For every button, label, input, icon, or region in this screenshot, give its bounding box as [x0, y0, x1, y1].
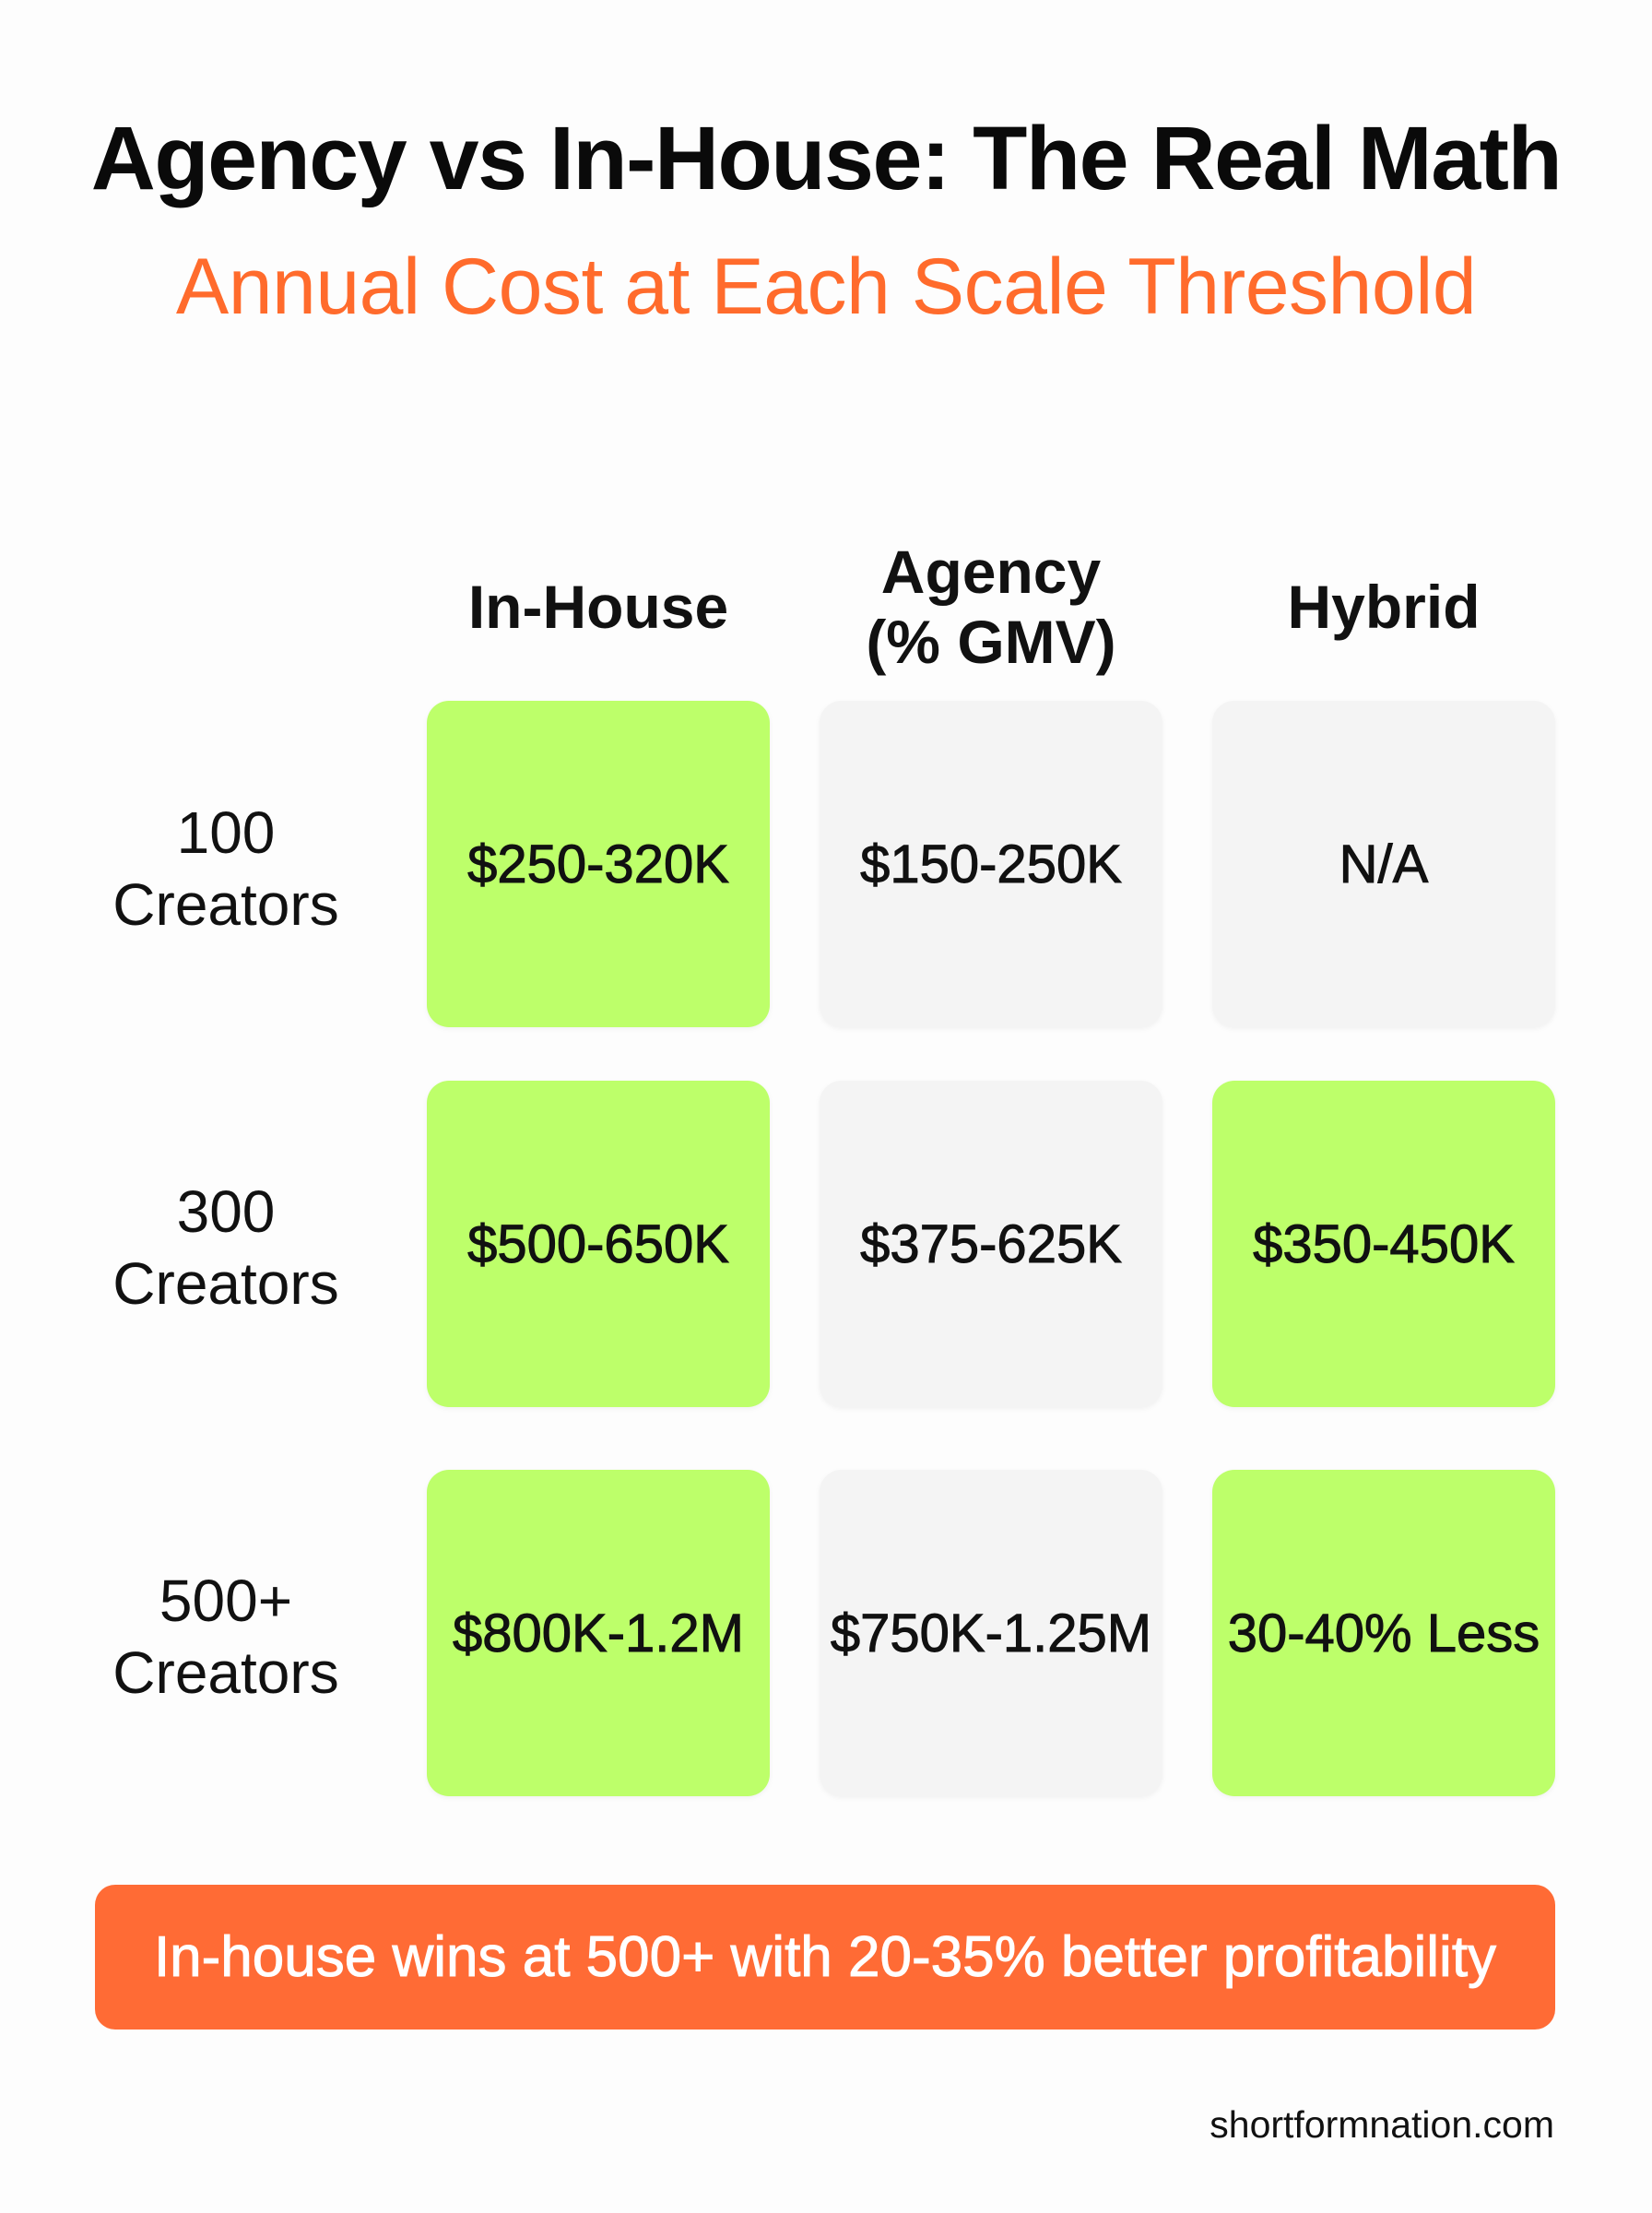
row label: 500+: Creators [112, 1639, 339, 1706]
subtitle: Annual Cost at Each Scale Threshold [176, 243, 1476, 331]
row label: 300: 300 [177, 1178, 275, 1245]
cell 500 agency [820, 1470, 1162, 1796]
cell 300 agency [820, 1081, 1162, 1407]
cell 100 in-house: $250-320K [467, 834, 729, 894]
row label: 500+ [112, 1568, 339, 1706]
cell 100 in-house [427, 701, 770, 1027]
footer: shortformnation.com [1210, 2103, 1554, 2146]
cell 500 hybrid: 30-40% Less [1228, 1603, 1540, 1663]
header: In-House: In-House [468, 573, 728, 641]
header: Agency [866, 538, 1116, 676]
row label: 300: Creators [112, 1250, 339, 1317]
header: Agency: Agency [881, 538, 1101, 606]
cell 300 agency: $375-625K [860, 1213, 1122, 1274]
header: Hybrid: Hybrid [1287, 573, 1481, 641]
row label: 100: Creators [112, 871, 339, 938]
cell 300 in-house [427, 1081, 770, 1407]
cell 300 hybrid [1212, 1081, 1555, 1407]
cell 300 in-house: $500-650K [467, 1213, 729, 1274]
callout banner [95, 1885, 1555, 2030]
cell 100 hybrid [1212, 701, 1555, 1027]
cell 500 agency: $750K-1.25M [831, 1603, 1151, 1663]
cell 100 agency: $150-250K [860, 834, 1122, 894]
cell 500 hybrid [1212, 1470, 1555, 1796]
header: Agency: (% GMV) [866, 608, 1116, 676]
row label: 500+: 500+ [159, 1568, 292, 1634]
cell 300 hybrid: $350-450K [1253, 1213, 1515, 1274]
callout banner: In-house wins at 500+ with 20-35% better profitability [154, 1925, 1496, 1989]
cell 500 in-house [427, 1470, 770, 1796]
cell 100 hybrid: N/A [1339, 834, 1428, 894]
cell 100 agency [820, 701, 1162, 1027]
title: Agency vs In-House: The Real Math [91, 108, 1561, 208]
row label: 100 [112, 799, 339, 938]
row label: 300 [112, 1178, 339, 1317]
row label: 100: 100 [177, 799, 275, 866]
cell 500 in-house: $800K-1.2M [453, 1603, 744, 1663]
